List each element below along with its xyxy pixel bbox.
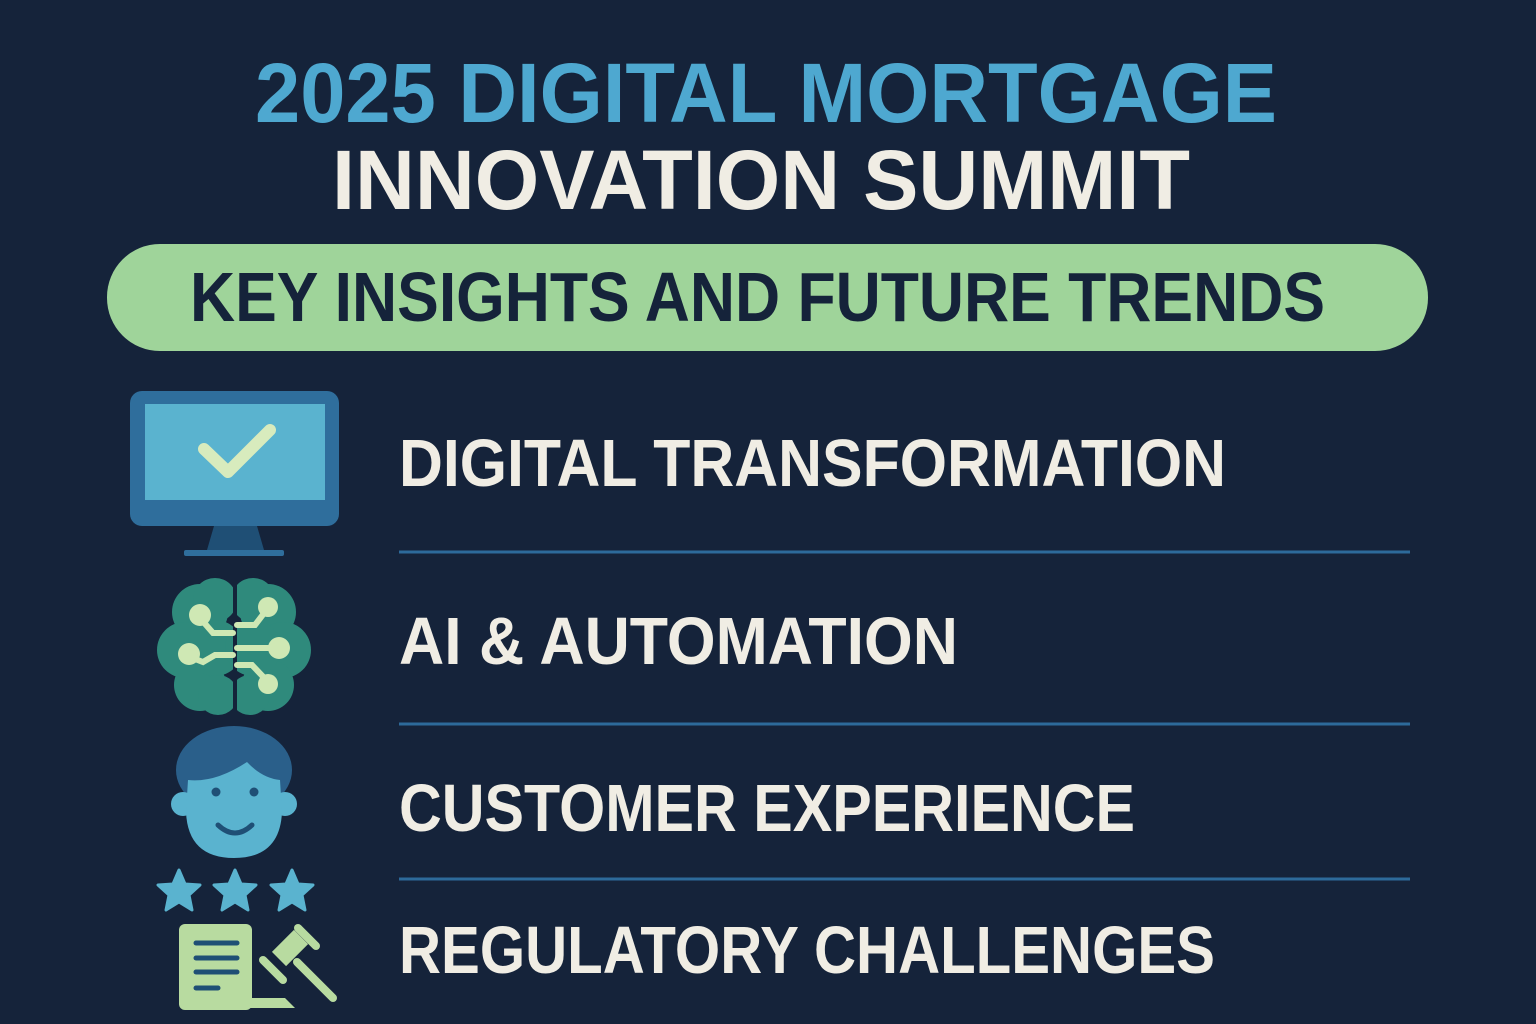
heading: digital transformation: DIGITAL TRANSFORMATION — [399, 426, 1226, 501]
heading: customer experience: CUSTOMER EXPERIENCE — [399, 771, 1135, 846]
icon: brain circuit — [157, 578, 311, 715]
subtitle pill — [107, 244, 1428, 351]
subtitle pill: KEY INSIGHTS AND FUTURE TRENDS — [190, 258, 1325, 336]
title: INNOVATION SUMMIT — [332, 133, 1190, 227]
icon: monitor with check — [130, 391, 339, 556]
icon: smiling customer with stars — [158, 726, 313, 910]
heading: regulatory challenges: REGULATORY CHALLENGES — [399, 913, 1215, 988]
heading: ai & automation: AI & AUTOMATION — [399, 604, 958, 679]
icon: document and gavel — [179, 924, 333, 1010]
title — [255, 46, 1277, 227]
title: 2025 DIGITAL MORTGAGE — [255, 46, 1277, 140]
